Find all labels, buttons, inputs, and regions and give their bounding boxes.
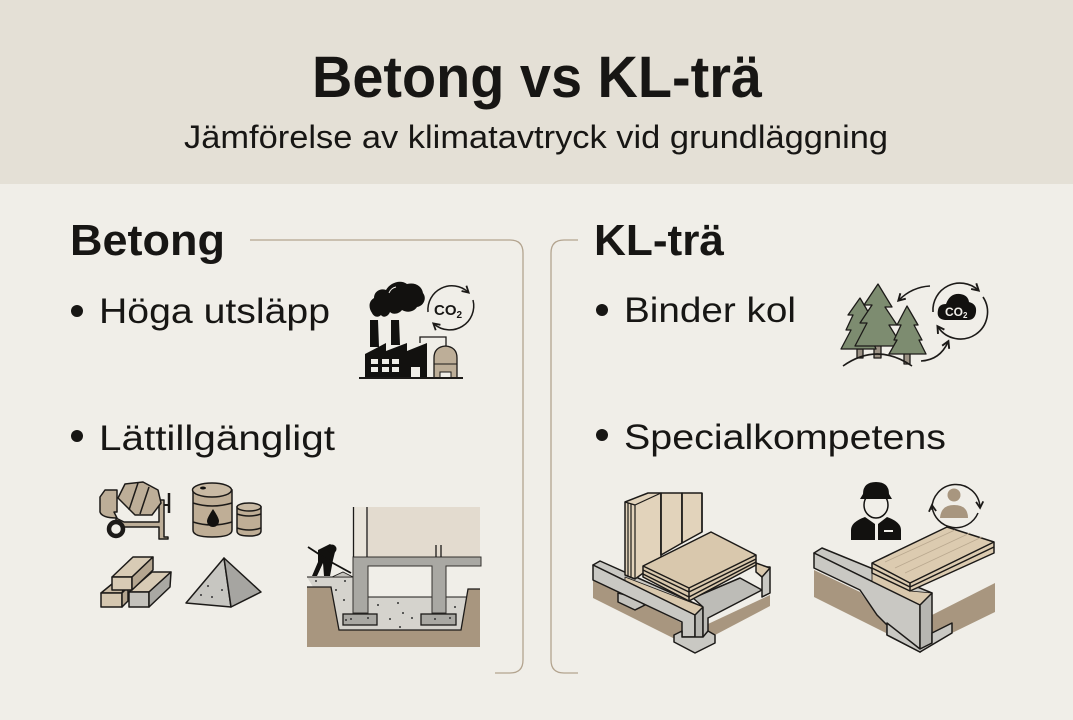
icon: trees and CO2 cycle: CO [945,305,963,319]
panel: KL-trä [551,216,995,673]
panel: Betong [70,216,523,673]
title: Betong vs KL-trä [312,45,763,110]
heading: Betong: Betong [70,216,225,265]
icon: barrels [192,483,261,537]
bullet: Lättillgängligt: Lättillgängligt [99,419,335,458]
icon: cement mixer [100,482,169,539]
icon: person in rotating circle [932,484,980,528]
illustration: concrete foundation [307,507,481,647]
icon: factory with CO2: 2 [456,310,462,321]
illustration: CLT slab on foundation [814,527,995,652]
icon: factory with CO2: CO [434,302,456,319]
icon: sand pile [186,558,261,607]
bullet: Höga utsläpp: Höga utsläpp [99,292,330,331]
icon: worker with shovel [308,544,353,577]
icon: timber stack [101,557,171,607]
icon: trees and CO2 cycle: 2 [963,311,968,320]
bullet: Binder kol: Binder kol [624,291,796,330]
icon: construction worker [851,482,901,540]
illustration: CLT wall and floor on foundation [593,493,770,653]
bullet: Specialkompetens: Specialkompetens [624,418,946,457]
icon: trees and CO2 cycle [841,283,988,366]
subtitle: Jämförelse av klimatavtryck vid grundläggning [184,119,888,155]
icon: factory with CO2 [359,282,474,378]
header band [0,0,1073,184]
heading: KL-trä: KL-trä [594,216,725,265]
